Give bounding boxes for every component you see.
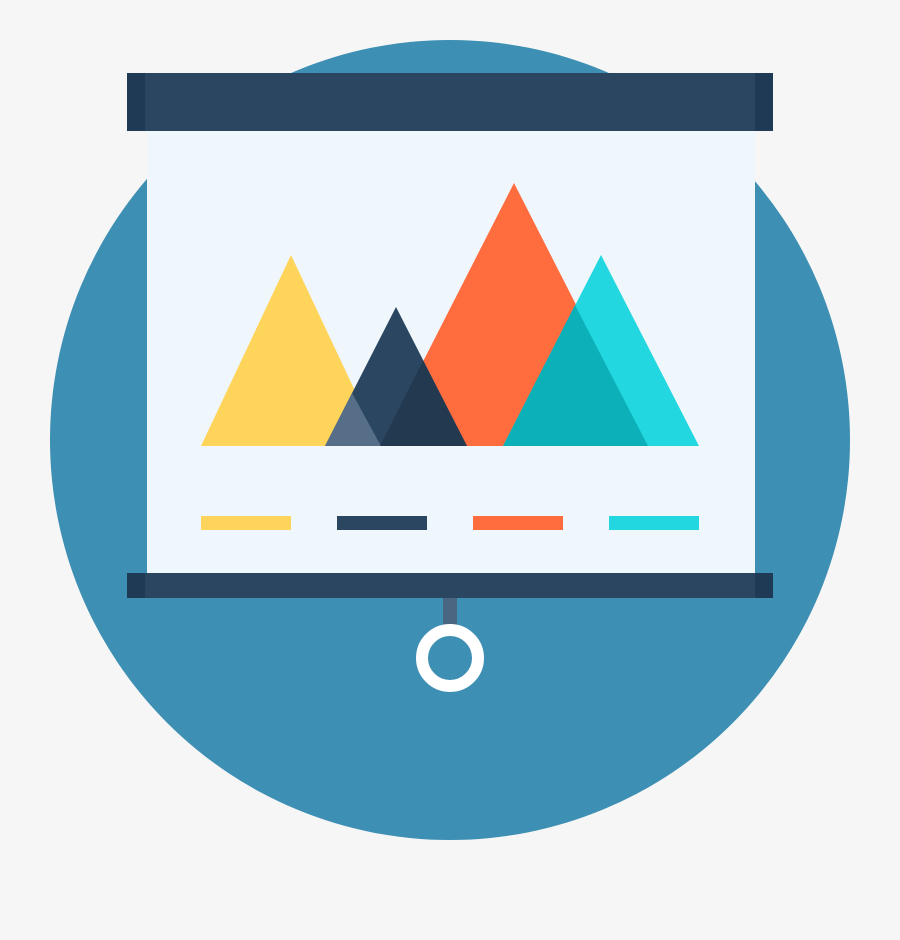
mountain chart [201, 183, 699, 446]
projector screen [127, 73, 773, 686]
background circle [50, 40, 850, 840]
bottom bar [127, 573, 773, 598]
top roller bar [127, 73, 773, 131]
legend bars [201, 516, 699, 530]
pull cord with ring [422, 598, 478, 686]
screen surface [147, 128, 755, 576]
